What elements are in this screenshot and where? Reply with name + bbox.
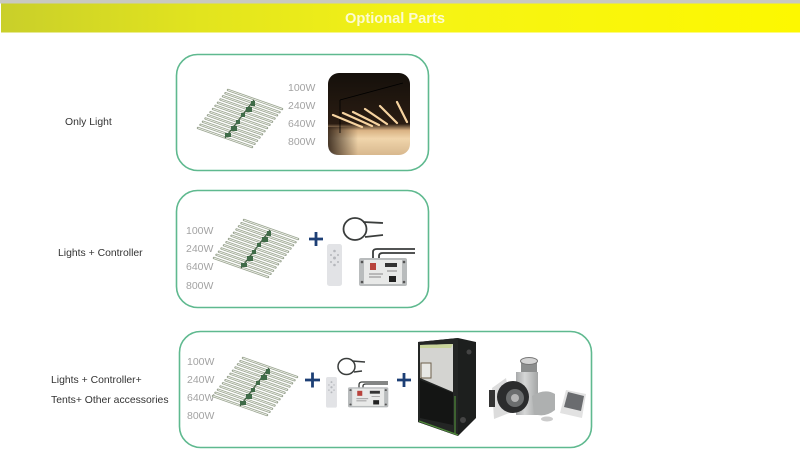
light fixture — [213, 358, 297, 415]
cable — [338, 358, 365, 374]
panel: only light — [176, 54, 428, 170]
row label: lights controller tents — [51, 375, 169, 406]
row label: lights controller tents: Lights + Controller+ — [51, 375, 142, 386]
wattage list: 100W — [186, 225, 214, 237]
wattage list: 800W — [288, 136, 316, 148]
wattage list: 640W — [186, 261, 214, 273]
wattage list: 240W — [187, 374, 215, 386]
wattage list: 800W — [186, 280, 214, 292]
wattage list: 100W — [187, 356, 215, 368]
photo: lit fixture — [328, 73, 410, 155]
wattage list — [186, 225, 214, 292]
wattage list: 640W — [288, 118, 316, 130]
wattage list: 240W — [288, 100, 316, 112]
plus sign — [397, 373, 411, 387]
panel: full kit — [180, 332, 592, 448]
controller box — [348, 382, 388, 407]
wattage list: 240W — [186, 243, 214, 255]
thermometer hygrometer — [560, 390, 586, 418]
panel: lights and controller — [176, 190, 428, 308]
remote control — [326, 377, 337, 408]
wattage list: 100W — [288, 82, 316, 94]
plus sign — [309, 232, 323, 246]
row label: only light: Only Light — [65, 117, 112, 128]
title: Optional Parts — [345, 10, 445, 27]
wattage list: 640W — [187, 392, 215, 404]
light fixture — [198, 90, 282, 147]
wattage list — [187, 356, 215, 422]
remote control — [327, 244, 342, 286]
wattage list: 800W — [187, 410, 215, 422]
plus sign — [305, 372, 320, 388]
grow tent — [418, 338, 476, 436]
row label: lights controller tents: Tents+ Other accessories — [51, 395, 169, 406]
controller box — [359, 249, 415, 286]
wattage list — [288, 82, 316, 148]
cable — [344, 218, 383, 240]
row label: lights and controller: Lights + Controller — [58, 248, 143, 259]
header band — [0, 0, 800, 32]
fan and filter kit — [489, 358, 555, 422]
light fixture — [214, 220, 298, 277]
